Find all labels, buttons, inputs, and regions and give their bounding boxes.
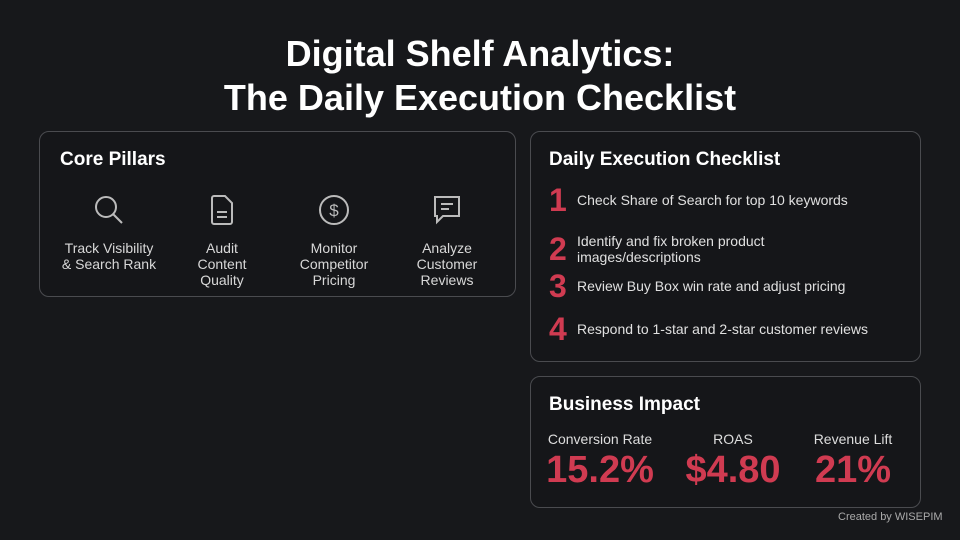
pillar: visibility: Track Visibility	[65, 240, 153, 256]
pillar: reviews: Reviews	[421, 272, 473, 288]
item 2: 2	[549, 231, 567, 267]
panel: daily checklist	[530, 131, 921, 362]
pillar: reviews: Analyze	[422, 240, 472, 256]
title: Digital Shelf Analytics:	[286, 33, 674, 74]
pillar: visibility	[62, 196, 156, 272]
metric: revenue	[814, 431, 892, 491]
pillar: reviews: Customer	[417, 256, 477, 272]
item 3	[549, 268, 845, 304]
pillar: pricing: Pricing	[313, 272, 355, 288]
item 4: Respond to 1-star and 2-star customer reviews	[577, 321, 868, 337]
heading: checklist: Daily Execution Checklist	[549, 149, 780, 170]
pillar: pricing: Competitor	[300, 256, 368, 272]
metric: roas: ROAS	[713, 431, 753, 447]
panel: business impact	[530, 376, 921, 508]
heading: impact: Business Impact	[549, 394, 700, 415]
pillar: pricing: Monitor	[311, 240, 357, 256]
metric: roas: $4.80	[685, 449, 781, 491]
metric: revenue: Revenue Lift	[814, 431, 892, 447]
item 2: Identify and fix broken product	[577, 233, 765, 249]
metric: conversion: 15.2%	[546, 449, 654, 491]
pillar: content: Content	[197, 256, 247, 272]
pillar: pricing	[300, 195, 368, 288]
item 3: Review Buy Box win rate and adjust pricing	[577, 278, 845, 294]
item 2	[549, 231, 765, 267]
heading: core pillars: Core Pillars	[60, 149, 166, 170]
item 1	[549, 182, 848, 218]
metric: conversion: Conversion Rate	[548, 431, 652, 447]
pillar: pricing: $	[329, 201, 339, 220]
panel: core pillars	[39, 131, 516, 297]
pillar: reviews	[417, 196, 478, 288]
item 1: Check Share of Search for top 10 keywords	[577, 192, 848, 208]
item 3: 3	[549, 268, 567, 304]
pillar: content	[197, 195, 247, 288]
pillar: visibility: & Search Rank	[62, 256, 156, 272]
item 1: 1	[549, 182, 567, 218]
item 4	[549, 311, 868, 347]
metric: revenue: 21%	[815, 449, 891, 491]
title: The Daily Execution Checklist	[224, 77, 736, 118]
credit: Created by WISEPIM	[838, 511, 943, 523]
pillar: content: Quality	[200, 272, 244, 288]
title	[224, 33, 736, 118]
item 4: 4	[549, 311, 567, 347]
item 2: images/descriptions	[577, 249, 701, 265]
pillar: content: Audit	[206, 240, 238, 256]
